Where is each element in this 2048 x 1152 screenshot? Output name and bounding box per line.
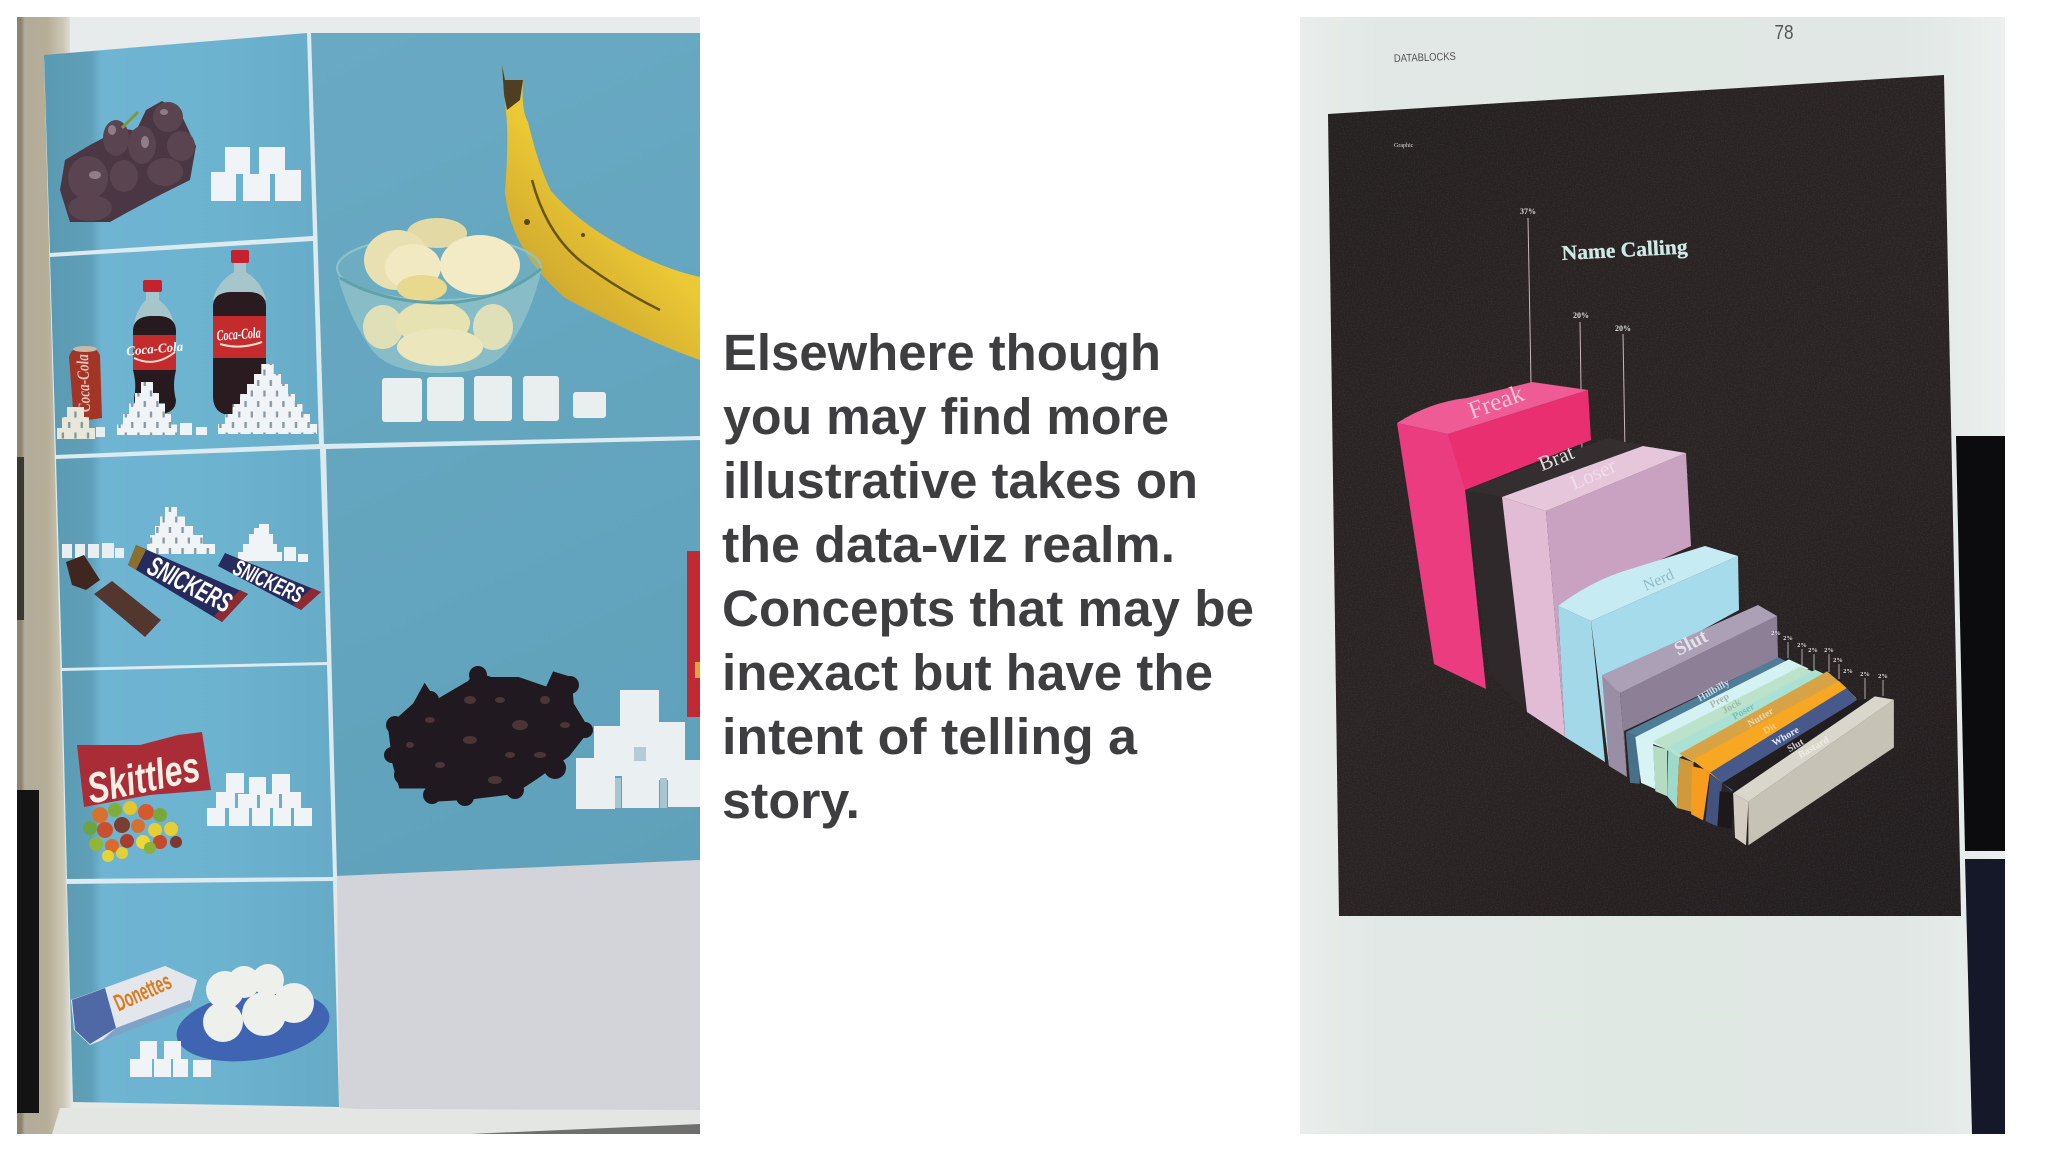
block: Nerd: Nerd [1641,566,1677,595]
block: Loser [1502,446,1691,737]
2% labels: 2% [1860,671,1870,678]
block: Loser: Loser [1566,453,1620,495]
icon: skittles bag: Skittles [83,743,204,813]
icon: donuts pack [71,966,197,1045]
2% labels: 2% [1797,642,1807,649]
running header: DATABLOCKS [1394,51,1456,65]
photo panel: banana [311,33,700,444]
icon: large bottle [213,250,266,415]
block: Slut: Slut [1671,625,1712,661]
icon: snickers bar large [128,545,248,622]
icon: cola can [69,346,102,422]
icon: donuts pack: Donettes [110,968,176,1017]
icon: bowl of banana slices [337,218,542,373]
icon: chocolate bar cut [66,555,161,637]
icon: snickers bar small [218,553,321,610]
2% labels: 2% [1771,630,1781,637]
next page: dark panel [1956,436,2005,851]
2% labels: 2% [1824,647,1834,654]
icon: snickers bar small: SNICKERS [229,554,308,608]
panel: sugar comparison book photo [17,17,700,1134]
icon: blue plate [176,992,330,1062]
block: Freak [1397,380,1591,689]
next page: navy panel [1965,859,2005,1134]
strip labels [1696,677,1832,761]
icon: cubes row [62,543,124,558]
3D paper bar chart [1397,207,1894,845]
icon: snickers bar large: SNICKERS [143,550,237,619]
panel: Name Calling book photo [1300,17,2005,1134]
photo panel: grapes [44,33,313,253]
icon: sugar pile small [57,407,105,439]
2% labels: 2% [1833,657,1843,664]
icon: sugar pyramid medium [117,382,207,435]
icon: red box [687,551,700,717]
icon: grapes [60,101,196,222]
block: Freak: Freak [1465,380,1528,425]
icon: sugar cubes [130,1041,211,1077]
block: Brat: Brat [1535,440,1577,476]
icon: medium bottle [126,280,184,414]
body text: Concepts that may be [722,580,1254,637]
icon: whole banana [502,65,700,360]
2% labels: 2% [1843,668,1853,675]
strip labels: Slut [1786,736,1807,755]
photo panel: raisins [326,440,700,876]
body text: intent of telling a [722,708,1138,765]
chart title: Name Calling [1561,234,1689,265]
photo panel: snickers [56,449,327,668]
small label: Graphic [1394,143,1414,149]
value labels and leaders: 10% [1672,469,1688,478]
block: Nerd [1558,546,1739,766]
strip labels: Jock [1720,697,1744,717]
page number: 78 [1774,22,1794,44]
icon: sugar cubes row [382,376,606,422]
2% labels [1771,630,1888,699]
block: Slut [1602,605,1778,777]
body text: story. [722,772,860,829]
icon: sugar pyramid large [218,364,317,434]
2% labels: 2% [1878,673,1888,680]
strip labels: Dit [1761,720,1779,737]
strip labels: Hillbilly [1696,677,1732,704]
icon: large bottle: Coca-Cola [216,325,262,345]
body text: illustrative takes on [723,452,1198,509]
icon: sugar cubes [207,773,312,826]
photo panel: cola [50,241,319,455]
photo panel: skittles [62,665,333,879]
value labels and leaders: 20% [1615,324,1631,333]
2% labels: 2% [1808,647,1818,654]
strip labels: Bastard [1796,734,1832,761]
strip labels: Poser [1731,701,1757,723]
value labels and leaders [1520,207,1688,547]
icon: sugar cubes [211,147,301,201]
thin strips [1626,657,1894,845]
block: Brat [1465,438,1643,712]
icon: medium bottle: Coca-Cola [126,339,184,358]
body text: Elsewhere though [723,324,1161,381]
body text: inexact but have the [722,644,1213,701]
strip labels: Whore [1770,724,1802,749]
body text: the data-viz realm. [722,516,1175,573]
value labels and leaders: 20% [1573,311,1589,320]
icon: cola can: Coca-Cola [73,354,94,413]
photo panel: donuts [67,881,339,1107]
body text: you may find more [723,388,1169,445]
body text [722,324,1254,829]
value labels and leaders: 37% [1520,207,1536,216]
icon: powdered donuts [203,964,314,1042]
strip labels: Prep [1708,691,1732,711]
strip labels: Nutter [1746,706,1776,730]
black chart panel [1320,70,1970,920]
icon: skittles candies [83,801,182,862]
icon: raisin pile [384,666,593,806]
icon: sugar cube stack [576,690,700,809]
icon: sugar pyramids [147,507,308,562]
2% labels: 2% [1783,635,1793,642]
